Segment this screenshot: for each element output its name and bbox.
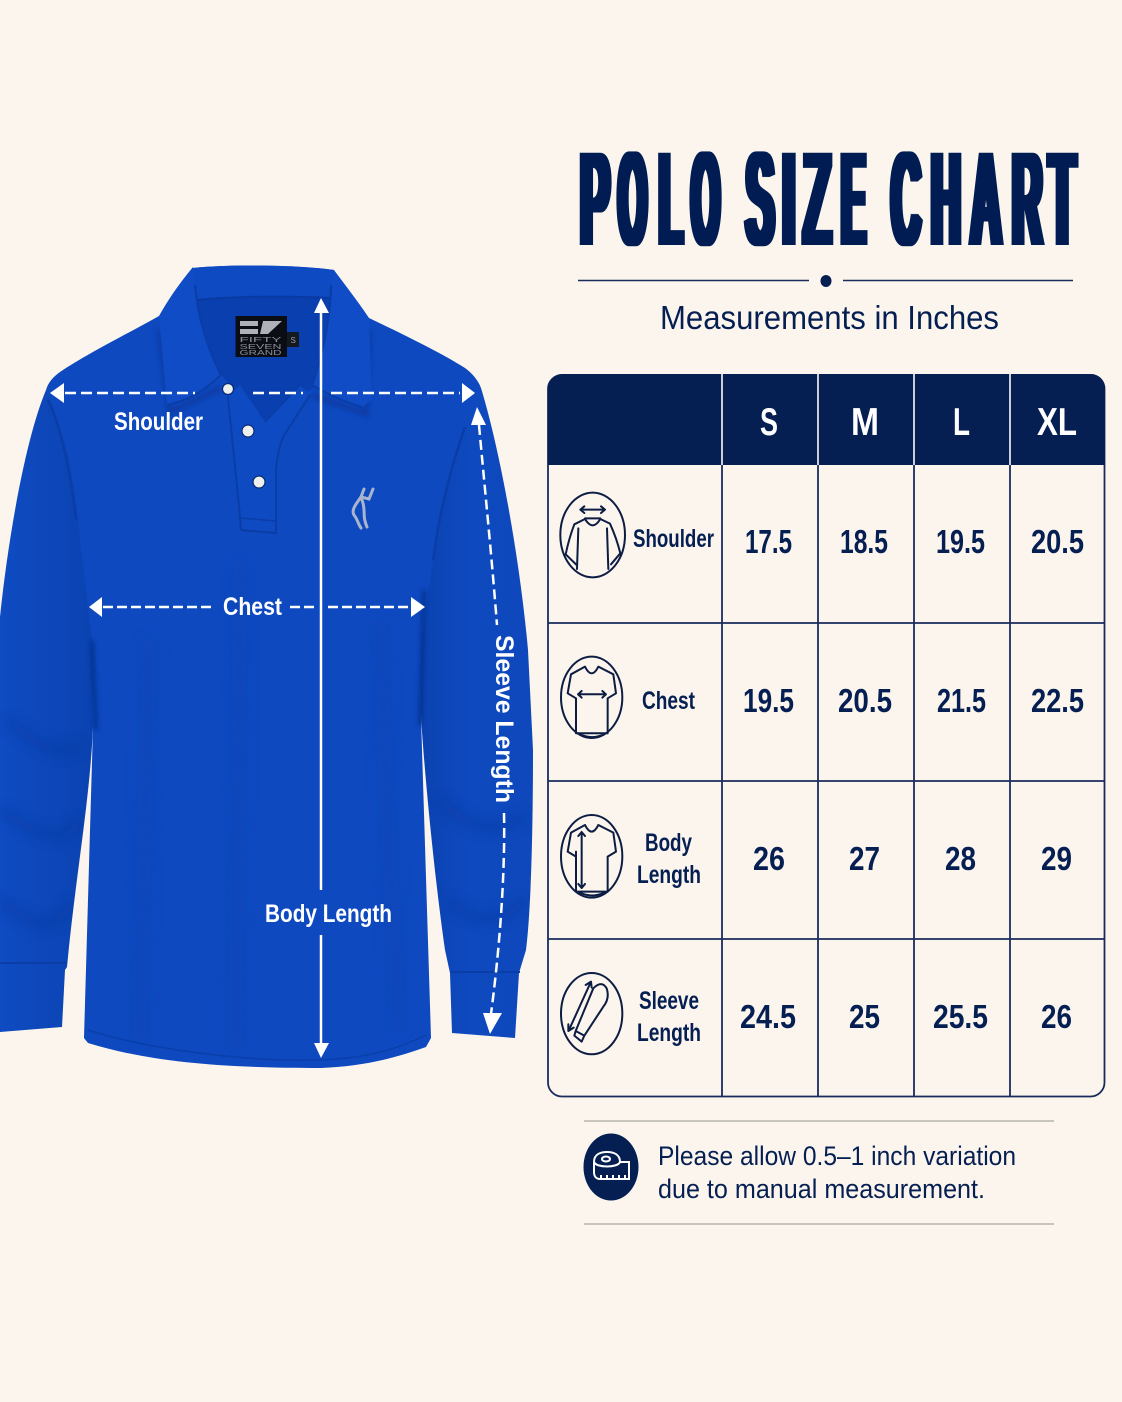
title: I — [782, 125, 795, 274]
row: sleeve length — [561, 973, 1072, 1054]
row: chest: 21.5 — [937, 682, 986, 719]
subtitle: Measurements in Inches — [660, 299, 999, 336]
row: body length: Body — [645, 829, 692, 857]
neck label — [236, 316, 299, 357]
row: chest — [561, 657, 1084, 738]
title: R — [1012, 125, 1042, 274]
shoulder measurement arrow — [50, 383, 475, 403]
icon: measuring tape — [584, 1134, 638, 1200]
title divider — [578, 275, 1073, 287]
body length arrow — [314, 298, 329, 1058]
body length label: Body Length — [265, 900, 392, 928]
table header: XL — [1037, 401, 1077, 444]
placket — [228, 385, 310, 533]
title: P — [580, 125, 610, 274]
neck label: FIFTY — [240, 337, 282, 344]
row: body length: Length — [637, 861, 701, 889]
polo shirt photo — [0, 266, 533, 1068]
note text — [658, 1141, 1016, 1204]
row: body length: 29 — [1041, 840, 1072, 877]
row: sleeve length: 25 — [849, 998, 880, 1035]
embroidered logo — [353, 489, 373, 528]
title: L — [659, 125, 682, 274]
icon: t-shirt with vertical arrow — [561, 815, 622, 898]
title: E — [842, 125, 865, 274]
footer note — [584, 1121, 1054, 1224]
shoulder label: Shoulder — [114, 408, 203, 436]
title: A — [970, 125, 1002, 274]
collar shadow — [159, 330, 369, 414]
inner neck and back band — [185, 266, 345, 422]
sleeve length label: Sleeve Length — [490, 635, 518, 803]
row: sleeve length: 24.5 — [740, 998, 796, 1035]
title: O — [691, 125, 720, 274]
left collar leaf — [159, 267, 221, 405]
row: body length — [561, 815, 1072, 898]
table header: L — [953, 401, 970, 444]
row: sleeve length: Length — [637, 1019, 701, 1047]
row: chest: 19.5 — [743, 682, 794, 719]
note text: due to manual measurement. — [658, 1174, 985, 1204]
row: body length: 26 — [753, 840, 785, 877]
shirt buttons — [222, 384, 265, 488]
row: shoulder: 18.5 — [840, 523, 888, 560]
row: shoulder: Shoulder — [633, 525, 714, 553]
row: body length: 27 — [849, 840, 880, 877]
table header — [548, 374, 1105, 465]
row: sleeve length: Sleeve — [639, 987, 699, 1015]
row: chest: 20.5 — [838, 682, 892, 719]
row: chest: 22.5 — [1031, 682, 1084, 719]
title — [580, 125, 1076, 274]
row: body length: 28 — [945, 840, 976, 877]
icon: long sleeve shirt with shoulder arrow — [560, 493, 625, 577]
row: sleeve length: 26 — [1041, 998, 1072, 1035]
table header: M — [851, 401, 879, 444]
right collar leaf — [312, 270, 372, 407]
neck label: SEVEN — [240, 344, 282, 351]
title: C — [891, 125, 921, 274]
title: Z — [803, 125, 831, 274]
row: shoulder — [560, 493, 1084, 577]
icon: t-shirt with chest arrow — [561, 657, 622, 738]
row: shoulder: 20.5 — [1031, 523, 1084, 560]
title: S — [746, 125, 774, 274]
icon: sleeve with diagonal arrow — [561, 973, 622, 1054]
row: chest: Chest — [642, 687, 696, 715]
note text: Please allow 0.5–1 inch variation — [658, 1141, 1016, 1171]
title: O — [618, 125, 647, 274]
row: sleeve length: 25.5 — [933, 998, 988, 1035]
chest label: Chest — [223, 593, 283, 621]
size table — [548, 374, 1105, 1097]
title: H — [931, 125, 961, 274]
table header: S — [760, 401, 778, 444]
row: shoulder: 17.5 — [745, 523, 792, 560]
row: shoulder: 19.5 — [936, 523, 985, 560]
neck label: S — [290, 336, 296, 345]
chest measurement arrow — [89, 597, 425, 617]
sleeve length arrow — [471, 407, 504, 1034]
neck label: GRAND — [240, 350, 282, 357]
